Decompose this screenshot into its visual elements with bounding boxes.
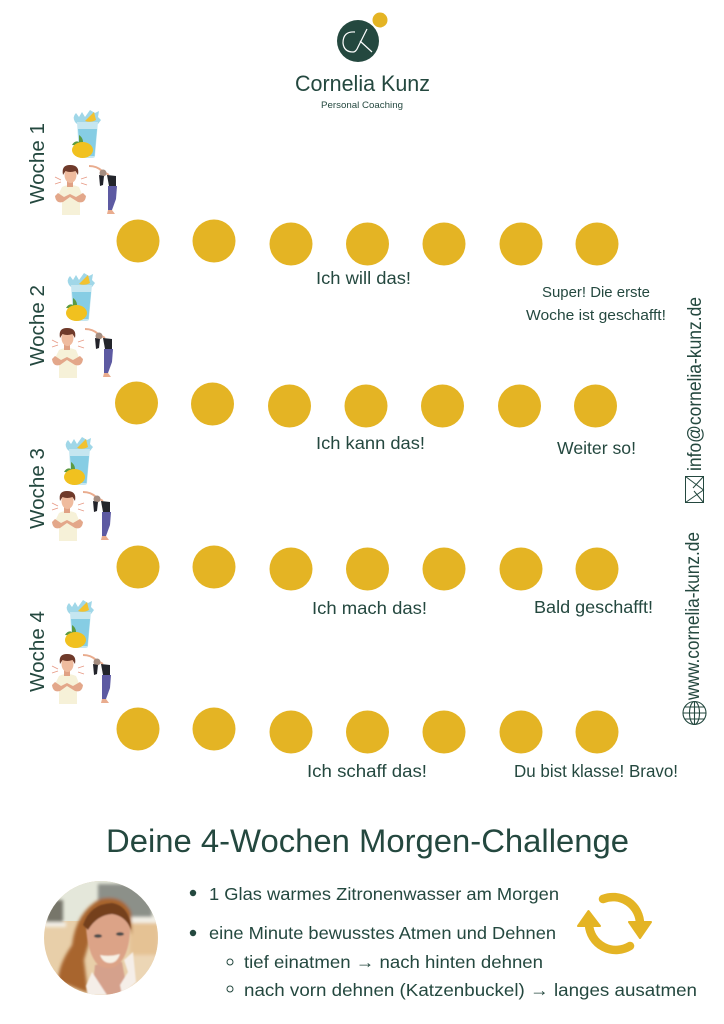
portrait photo bbox=[44, 881, 158, 995]
week 2 motto: Ich kann das! bbox=[316, 433, 425, 453]
week 2 encouragement: Weiter so! bbox=[557, 438, 636, 458]
icon: lemon water bbox=[66, 273, 95, 321]
sub-bullet: inhale: tief einatmen → nach hinten dehnen bbox=[244, 952, 543, 972]
icon: breathing person bbox=[52, 328, 84, 378]
website address: www.cornelia-kunz.de bbox=[683, 532, 704, 701]
sub-bullet: exhale: nach vorn dehnen (Katzenbuckel) → langes ausatmen bbox=[244, 980, 697, 1000]
logo bbox=[295, 12, 430, 111]
checklist bbox=[190, 884, 697, 1000]
week 1 motto: Ich will das! bbox=[316, 268, 411, 288]
week 1 encouragement bbox=[526, 284, 666, 324]
week 4 motto: Ich schaff das! bbox=[307, 761, 427, 781]
bullet: lemon water: 1 Glas warmes Zitronenwasser am Morgen bbox=[209, 884, 559, 904]
week 3 motto: Ich mach das! bbox=[312, 598, 427, 618]
icon: lemon water bbox=[72, 110, 101, 158]
icon: breathing person bbox=[55, 165, 87, 215]
icon: breathing person bbox=[52, 654, 84, 704]
week 1 encouragement: Woche ist geschafft! bbox=[526, 307, 666, 324]
week 2 label: Woche 2 bbox=[26, 285, 49, 366]
bullet: breathing and stretching: eine Minute bewusstes Atmen und Dehnen bbox=[209, 923, 556, 943]
logo mark: CK monogram bbox=[337, 12, 388, 62]
week 3 row bbox=[26, 437, 653, 618]
icon: lemon water bbox=[64, 437, 93, 485]
week 4 row bbox=[26, 600, 678, 781]
icon: envelope bbox=[686, 476, 704, 502]
week 3 encouragement: Bald geschafft! bbox=[534, 597, 653, 617]
icon: breathing person bbox=[52, 491, 84, 541]
icon: stretching woman bbox=[83, 492, 111, 540]
week 1 encouragement: Super! Die erste bbox=[542, 284, 650, 301]
email address: info@cornelia-kunz.de bbox=[685, 297, 706, 471]
week 2 row bbox=[26, 273, 636, 458]
week 1 row bbox=[26, 110, 666, 324]
contact sidebar bbox=[683, 297, 706, 724]
week 1 label: Woche 1 bbox=[26, 123, 49, 204]
icon: stretching woman bbox=[85, 329, 113, 377]
week 4 encouragement: Du bist klasse! Bravo! bbox=[514, 761, 678, 781]
week 3 day circles bbox=[116, 546, 618, 590]
week 3 label: Woche 3 bbox=[26, 448, 49, 529]
icon: stretching woman bbox=[83, 655, 111, 703]
logo name: Cornelia Kunz bbox=[295, 71, 430, 96]
icon: globe bbox=[683, 702, 706, 724]
week 4 day circles bbox=[116, 708, 618, 754]
week 4 label: Woche 4 bbox=[26, 611, 49, 692]
title: Deine 4-Wochen Morgen-Challenge bbox=[106, 823, 629, 859]
icon: stretching woman bbox=[89, 166, 117, 214]
week 1 day circles bbox=[116, 220, 618, 266]
week 2 day circles bbox=[115, 382, 617, 428]
icon: repeat arrows bbox=[578, 897, 651, 950]
logo tagline: Personal Coaching bbox=[321, 100, 403, 111]
icon: lemon water bbox=[65, 600, 94, 648]
